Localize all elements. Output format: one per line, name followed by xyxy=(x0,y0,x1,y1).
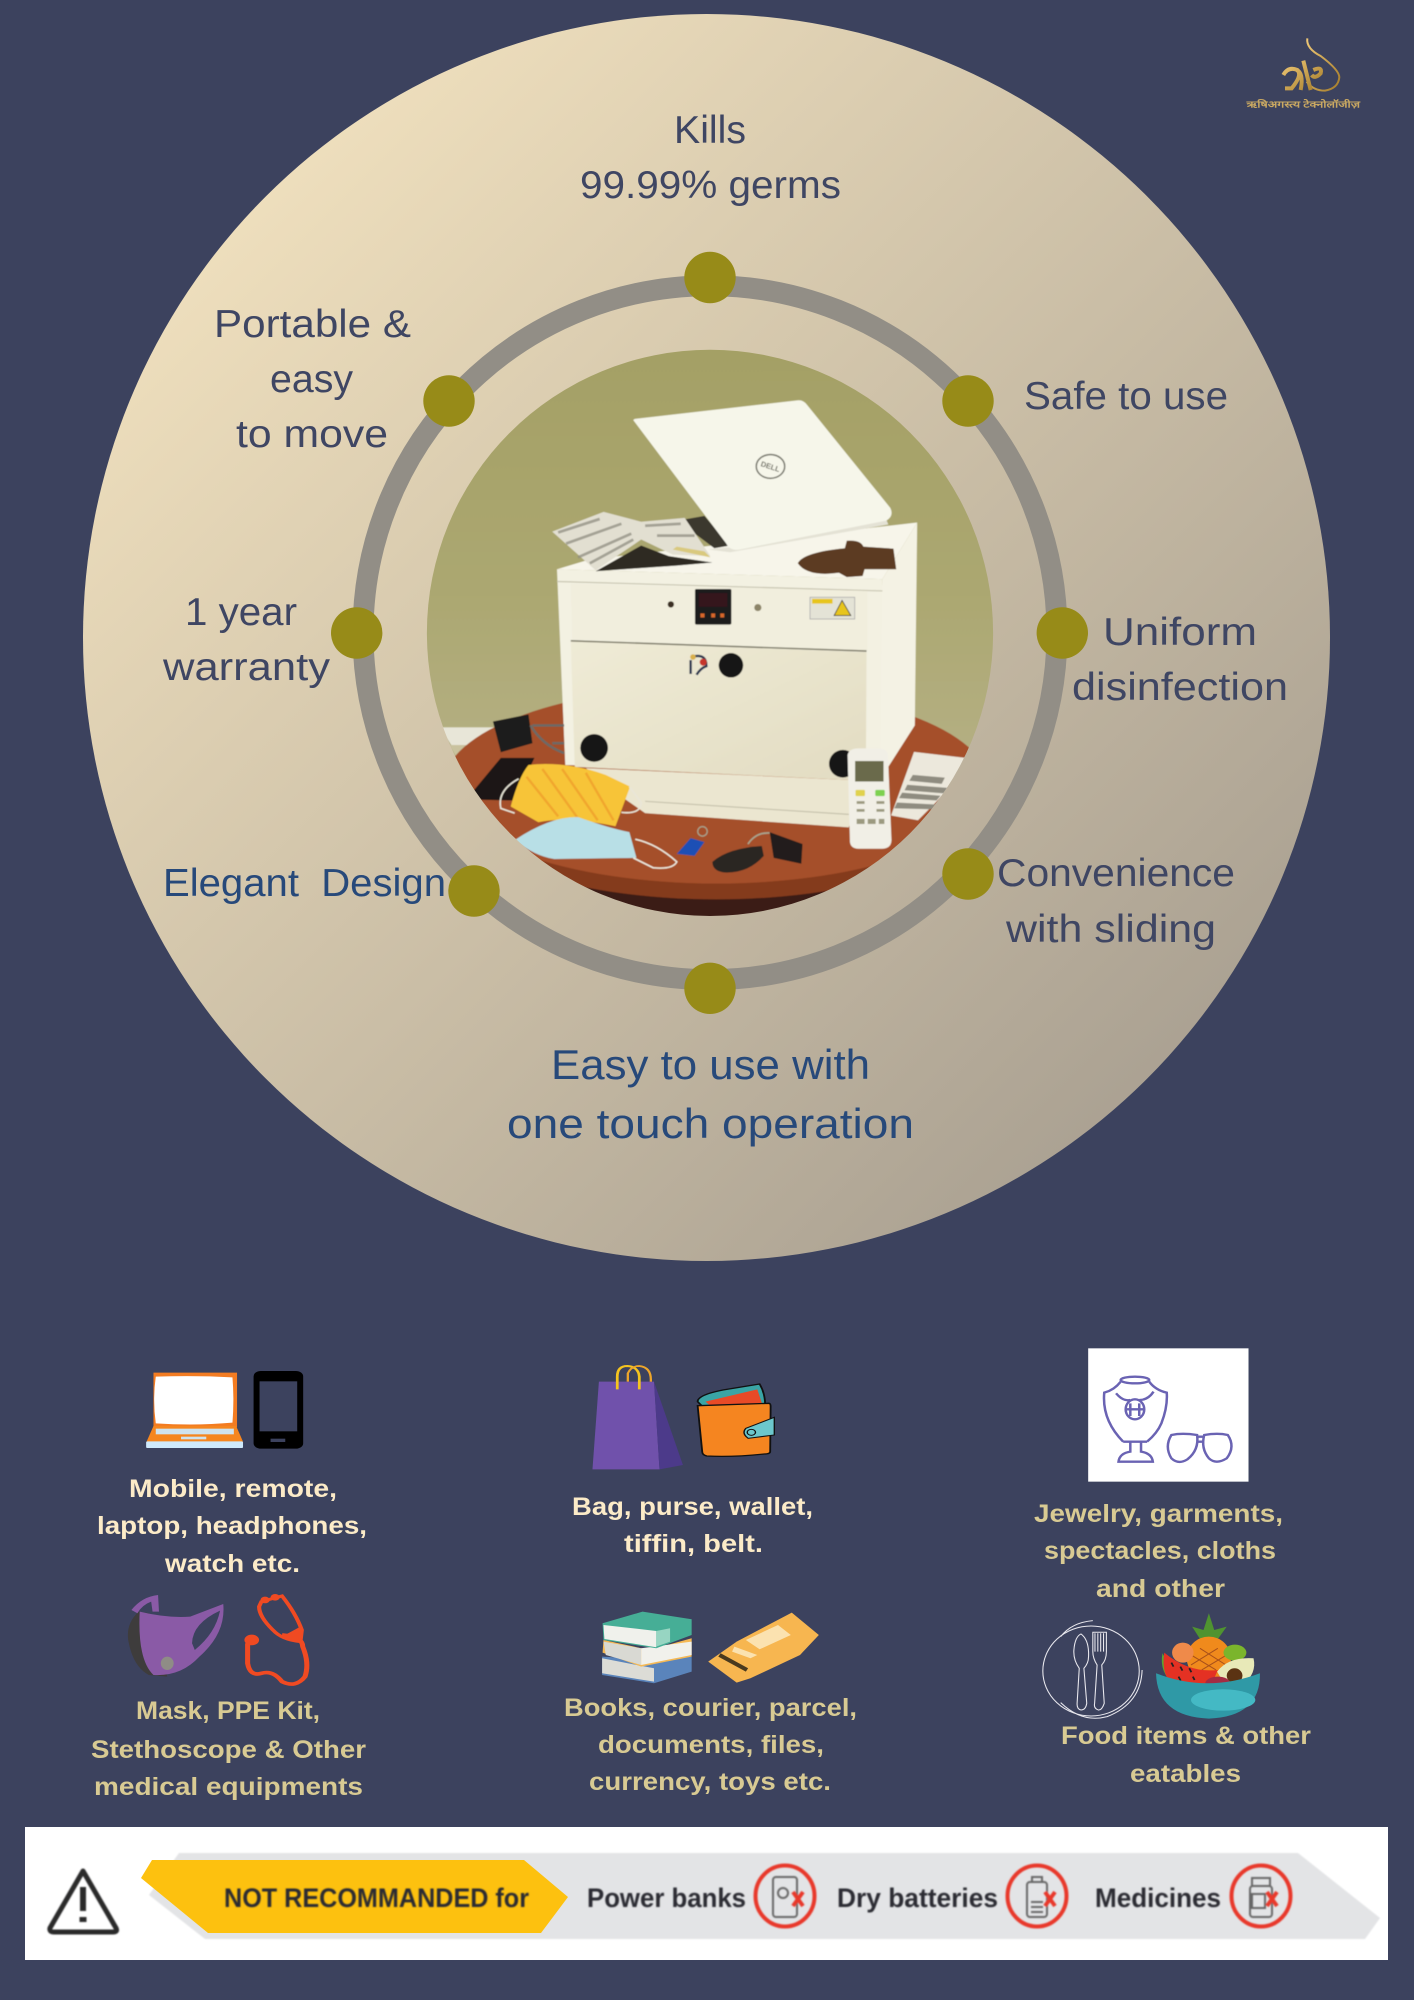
icon: plate and fruit bowl xyxy=(1043,1613,1260,1719)
panel: food xyxy=(1043,1613,1311,1788)
label: warranty: warranty xyxy=(162,646,331,689)
text: medicines: Medicines xyxy=(1095,1883,1221,1913)
node: lower left xyxy=(448,865,500,917)
logo xyxy=(1245,38,1361,110)
text: food: Food items & other xyxy=(1061,1722,1311,1750)
label: warranty: 1 year xyxy=(185,591,297,634)
panel: medical xyxy=(91,1594,366,1801)
product photo: DELL xyxy=(760,459,781,474)
label: easy to use: one touch operation xyxy=(507,1100,914,1147)
text: food xyxy=(1061,1722,1311,1788)
label: convenience xyxy=(997,852,1235,951)
label: convenience: with sliding xyxy=(1005,908,1216,951)
text: electronics: watch etc. xyxy=(164,1550,300,1578)
text: bags: Bag, purse, wallet, xyxy=(572,1493,813,1521)
text: documents xyxy=(564,1694,857,1796)
node: top xyxy=(684,252,736,303)
icon: no dry batteries xyxy=(1008,1866,1066,1926)
text: not recommended for: NOT RECOMMANDED for xyxy=(224,1883,529,1913)
label: kills germs xyxy=(580,109,841,207)
label: portable xyxy=(214,303,411,456)
icon: necklace and glasses xyxy=(1088,1348,1249,1482)
panel: feature wheel xyxy=(83,14,1330,1261)
text: documents: Books, courier, parcel, xyxy=(564,1694,857,1722)
text: jewelry xyxy=(1034,1500,1283,1603)
panel: bags xyxy=(572,1366,813,1558)
text: power banks: Power banks xyxy=(587,1883,746,1913)
node: right xyxy=(1037,607,1088,659)
text: food: eatables xyxy=(1130,1760,1241,1788)
text: documents: documents, files, xyxy=(598,1731,824,1759)
label: warranty xyxy=(162,591,331,689)
label: uniform disinfection: disinfection xyxy=(1072,666,1288,709)
outer beige disc xyxy=(83,14,1330,1261)
grey ring xyxy=(363,286,1057,980)
icon: books and parcel xyxy=(602,1612,819,1683)
node: bottom xyxy=(684,963,736,1014)
text: jewelry: and other xyxy=(1096,1575,1225,1603)
text: bags xyxy=(572,1493,813,1558)
text: electronics xyxy=(97,1475,367,1578)
label: portable: to move xyxy=(236,413,388,456)
grey arrow ribbon xyxy=(149,1853,1380,1939)
label: kills germs: Kills xyxy=(674,109,746,152)
icon: no power banks xyxy=(756,1866,814,1926)
panel: not recommended banner xyxy=(25,1827,1388,1960)
panel: electronics xyxy=(97,1371,367,1578)
label: kills germs: 99.99% germs xyxy=(580,164,841,207)
banner background xyxy=(25,1827,1388,1960)
text: medical: medical equipments xyxy=(94,1773,363,1801)
label: portable: Portable & xyxy=(214,303,411,346)
icon: mask and stethoscope xyxy=(128,1594,307,1684)
text: bags: tiffin, belt. xyxy=(624,1530,763,1558)
label: uniform disinfection: Uniform xyxy=(1103,611,1257,654)
text: medical xyxy=(91,1697,366,1801)
panel: jewelry xyxy=(1034,1348,1283,1603)
text: jewelry: spectacles, cloths xyxy=(1044,1537,1276,1565)
text: medical: Stethoscope & Other xyxy=(91,1736,366,1764)
node: lower right xyxy=(942,848,994,900)
product photo xyxy=(424,346,997,919)
label: easy to use xyxy=(507,1041,914,1147)
label: uniform disinfection xyxy=(1072,611,1288,709)
label: elegant design: Elegant Design xyxy=(163,862,446,905)
label: safe to use: Safe to use xyxy=(1024,375,1228,418)
text: electronics: laptop, headphones, xyxy=(97,1512,367,1540)
text: medical: Mask, PPE Kit, xyxy=(136,1697,320,1725)
text: dry batteries: Dry batteries xyxy=(837,1883,998,1913)
icon: laptop and phone xyxy=(146,1371,303,1449)
node: upper left xyxy=(423,375,475,427)
icon: bag and wallet xyxy=(592,1366,774,1469)
label: easy to use: Easy to use with xyxy=(551,1041,870,1088)
icon: warning triangle xyxy=(50,1871,117,1932)
node: left xyxy=(331,607,382,659)
text: documents: currency, toys etc. xyxy=(589,1768,831,1796)
node: upper right xyxy=(942,375,994,427)
text: jewelry: Jewelry, garments, xyxy=(1034,1500,1283,1528)
panel: documents xyxy=(564,1612,857,1796)
label: portable: easy xyxy=(270,358,353,401)
label: convenience: Convenience xyxy=(997,852,1235,895)
icon: no medicines xyxy=(1232,1866,1290,1926)
logo: ऋषिअगस्त्य टेक्नोलॉजीज़ xyxy=(1245,98,1361,110)
yellow tag xyxy=(141,1860,568,1933)
text: electronics: Mobile, remote, xyxy=(129,1475,337,1503)
